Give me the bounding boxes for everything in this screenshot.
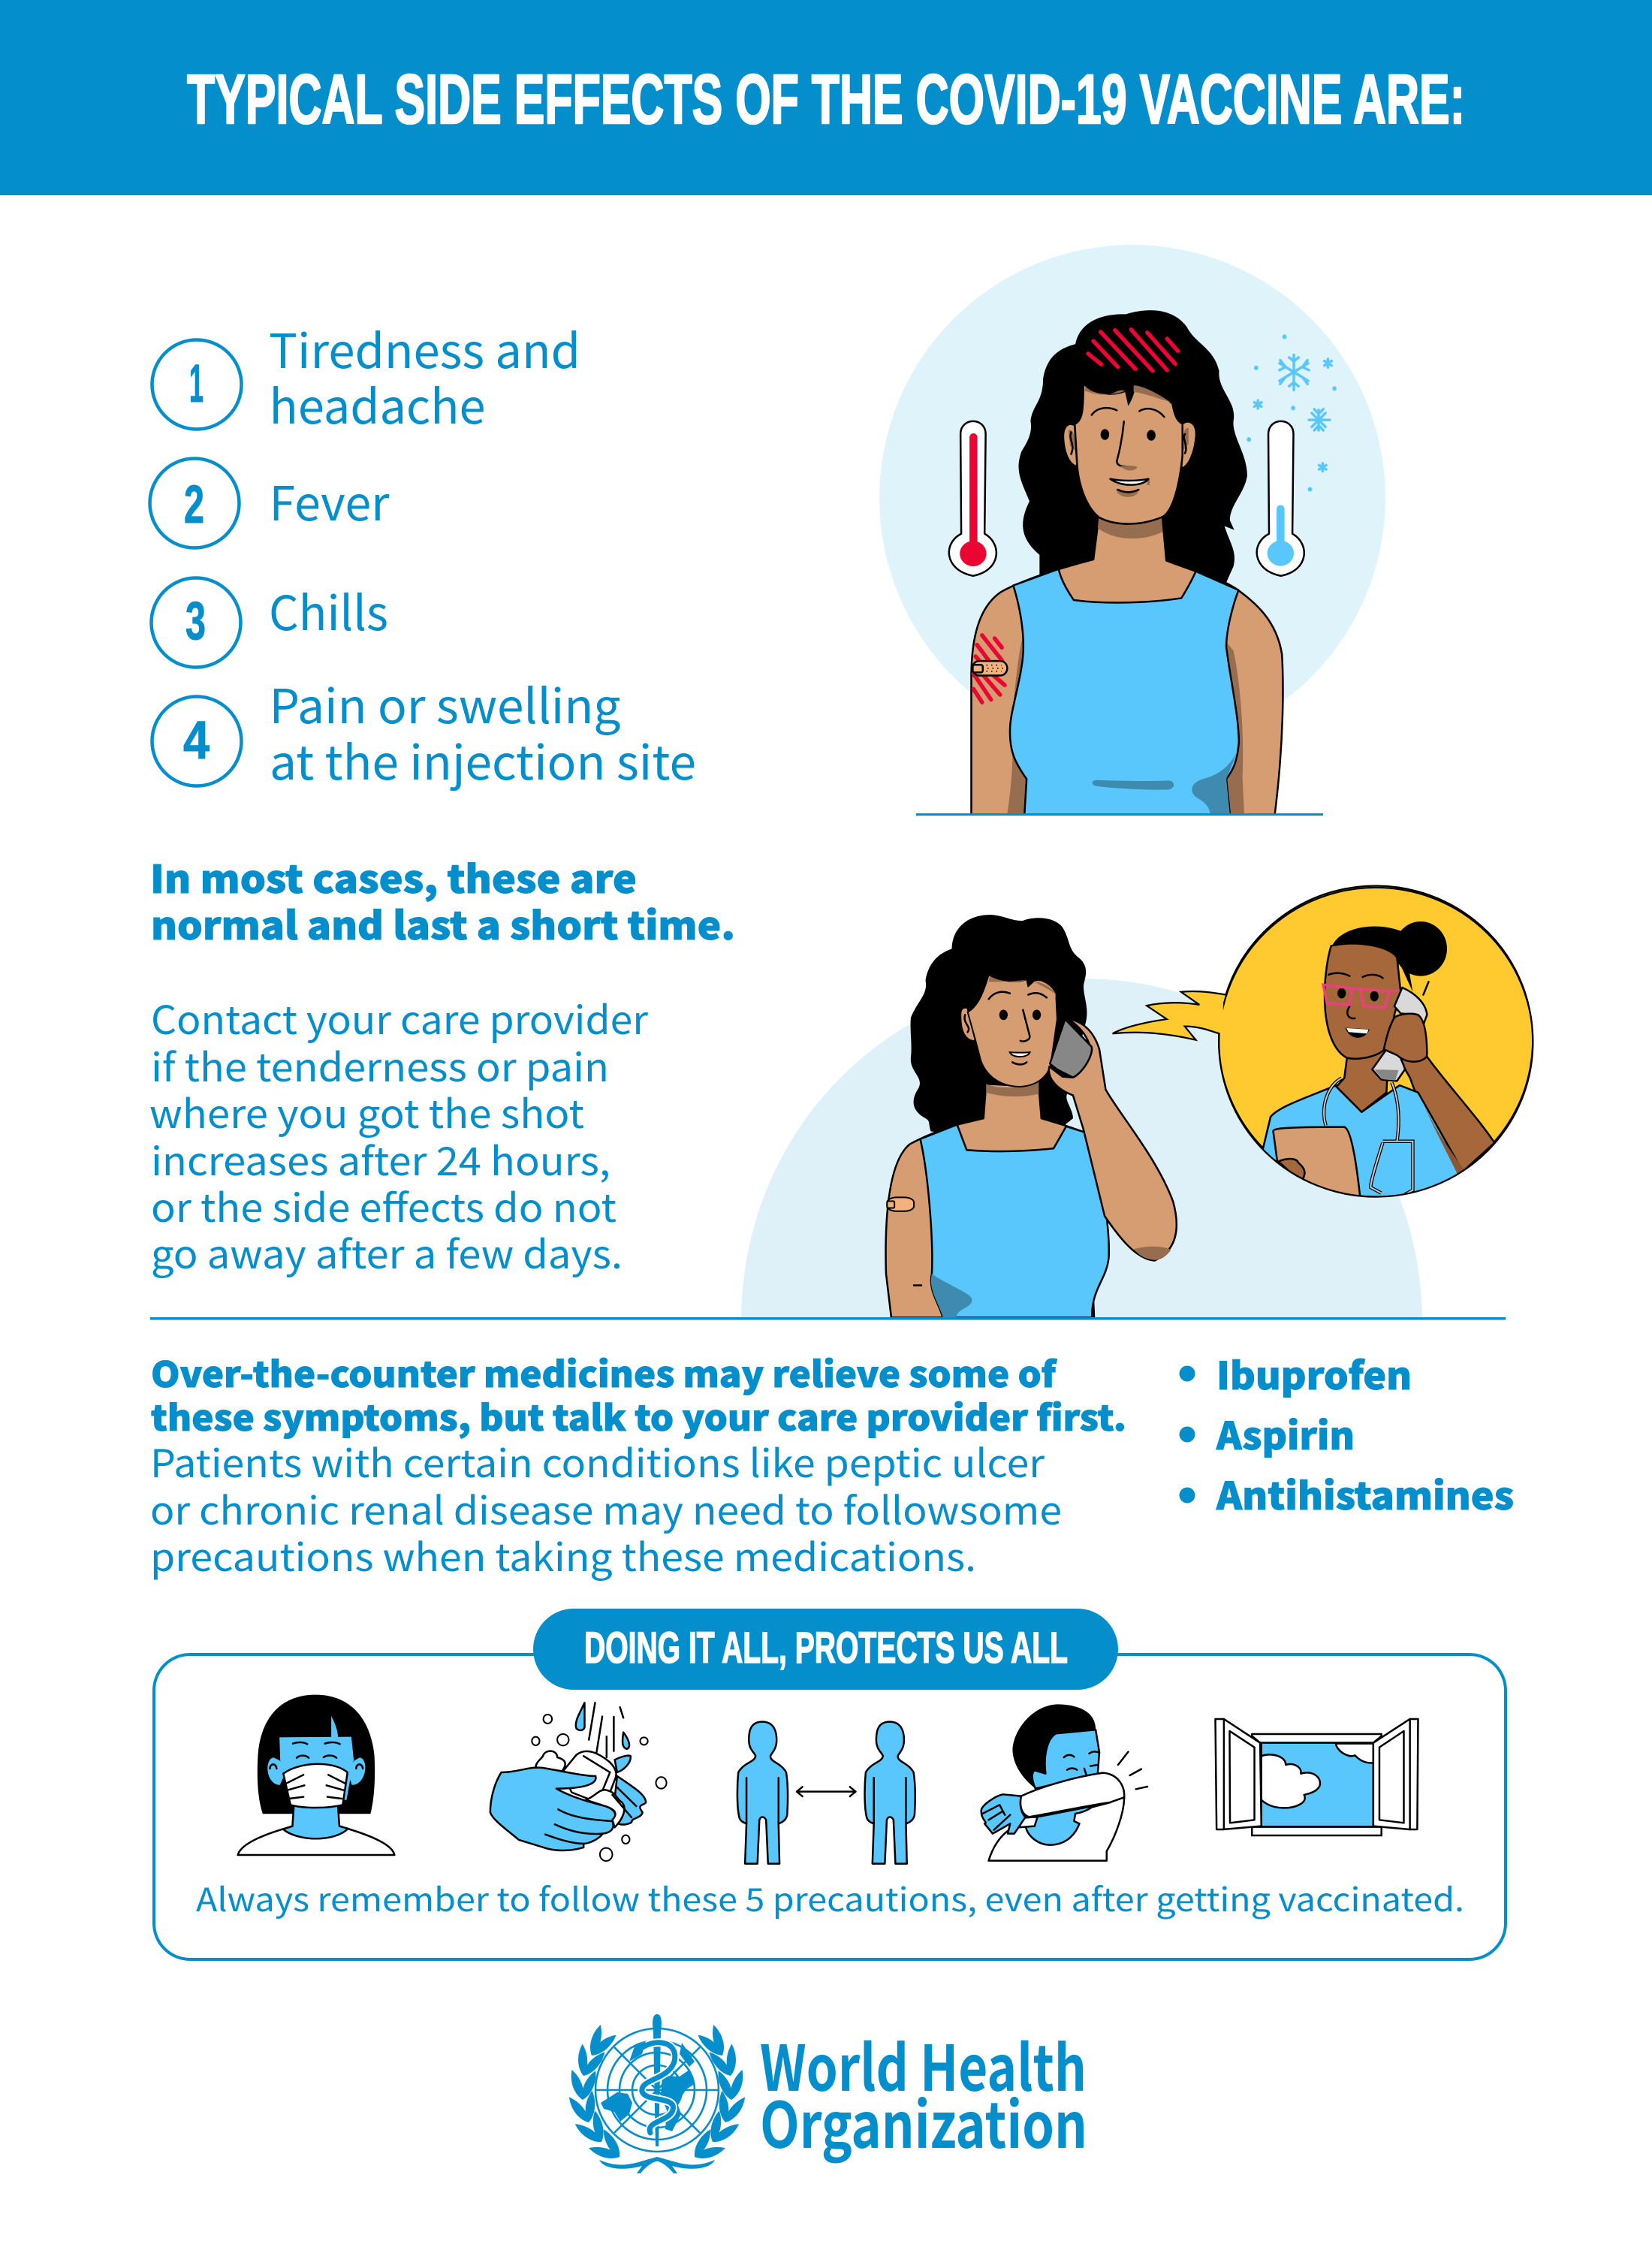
item 4 text <box>269 669 696 794</box>
ribbon <box>599 2157 715 2173</box>
bullet: antihistamines: Antihistamines <box>1216 1467 1514 1521</box>
medicines advice body text: Patients with certain conditions like peptic ulcer <box>150 1433 1045 1488</box>
hot thermometer <box>949 421 996 576</box>
advice: when to contact care provider: or the side effects do not <box>151 1177 616 1233</box>
illustration: woman with side effects <box>879 245 1385 815</box>
header banner <box>0 0 1652 195</box>
note: normal side effects <box>150 849 735 951</box>
item 4 text: Pain or swelling <box>269 669 620 737</box>
laurel right <box>689 2024 750 2160</box>
number badge 4: 4 <box>183 711 210 771</box>
cold thermometer <box>1257 421 1304 576</box>
bandage <box>972 661 1007 675</box>
advice: when to contact care provider: increases after 24 hours, <box>151 1130 610 1187</box>
note: normal side effects: In most cases, these are <box>150 849 637 904</box>
panel: numbered list of side effects <box>150 314 696 794</box>
icon: person wearing mask <box>238 1695 394 1855</box>
advice: when to contact care provider: where you got the shot <box>149 1083 584 1139</box>
bullet: ibuprofen: Ibuprofen <box>1216 1347 1412 1401</box>
medicines advice bold text: Over-the-counter medicines may relieve some of <box>151 1346 1057 1398</box>
panel: precautions box <box>154 1609 1506 1959</box>
number badge 1: 1 <box>189 354 203 414</box>
laurel left <box>564 2024 625 2160</box>
item 2 text: Fever <box>269 466 390 535</box>
advice: when to contact care provider: go away after a few days. <box>151 1223 623 1280</box>
woman figure <box>971 310 1283 815</box>
staff and serpent <box>653 2014 662 2146</box>
icon: sneezing into elbow <box>981 1704 1147 1861</box>
item 1 text <box>269 314 580 438</box>
pale blue dome background <box>741 979 1422 1318</box>
clipboard <box>1274 1127 1360 1197</box>
medicines advice body text <box>150 1433 1062 1582</box>
advice: when to contact care provider <box>149 989 649 1280</box>
headache hatch marks <box>1088 330 1178 371</box>
medicines advice body text: precautions when taking these medications. <box>150 1527 976 1582</box>
icon: physical distancing <box>737 1722 915 1864</box>
logo wordmark: World Health <box>760 2019 1087 2110</box>
precautions caption: Always remember to follow these 5 precautions, even after getting vaccinated. <box>196 1874 1464 1921</box>
woman on the phone <box>886 915 1177 1317</box>
logo wordmark: Organization <box>760 2076 1087 2167</box>
illustration: woman calling care provider <box>741 885 1533 1318</box>
item 3 text: Chills <box>269 576 388 644</box>
stethoscope <box>1324 1078 1412 1195</box>
logo emblem <box>564 2014 750 2173</box>
ground line under woman <box>916 813 1323 816</box>
medicines advice bold text <box>151 1346 1126 1441</box>
number badge 2: 2 <box>184 475 204 535</box>
number badge 4 <box>152 697 242 786</box>
advice: when to contact care provider: if the tenderness or pain <box>151 1036 609 1093</box>
advice: when to contact care provider: Contact your care provider <box>151 989 649 1045</box>
number badge 1 <box>152 339 242 430</box>
precautions heading pill: DOING IT ALL, PROTECTS US ALL <box>584 1624 1068 1672</box>
pink glasses <box>1323 985 1400 1008</box>
snowflakes <box>1247 334 1337 492</box>
precautions heading pill <box>533 1609 1118 1690</box>
medicines advice bold text: these symptoms, but talk to your care provider first. <box>151 1389 1126 1441</box>
number badge 2 <box>150 458 239 548</box>
bandage <box>887 1197 914 1211</box>
icon: washing hands <box>490 1703 667 1861</box>
medicines bullet list <box>1179 1347 1514 1521</box>
icon: open window <box>1216 1719 1418 1835</box>
note: normal side effects: normal and last a short time. <box>151 895 735 951</box>
item 1 text: Tiredness and <box>269 314 580 382</box>
pale blue circle background <box>879 245 1385 751</box>
speech bubble with nurse <box>1113 885 1533 1197</box>
divider rule <box>150 1317 1506 1320</box>
continents <box>601 2043 695 2131</box>
bullet: aspirin: Aspirin <box>1216 1407 1355 1461</box>
item 4 text: at the injection site <box>270 725 696 794</box>
logo: World Health Organization <box>564 2014 1087 2173</box>
arm soreness hatch marks <box>973 635 1005 702</box>
number badge 3: 3 <box>185 592 206 651</box>
medicines advice body text: or chronic renal disease may need to followsome <box>150 1480 1062 1536</box>
item 1 text: headache <box>269 369 485 438</box>
number badge 3 <box>152 578 240 667</box>
logo wordmark <box>760 2019 1087 2167</box>
